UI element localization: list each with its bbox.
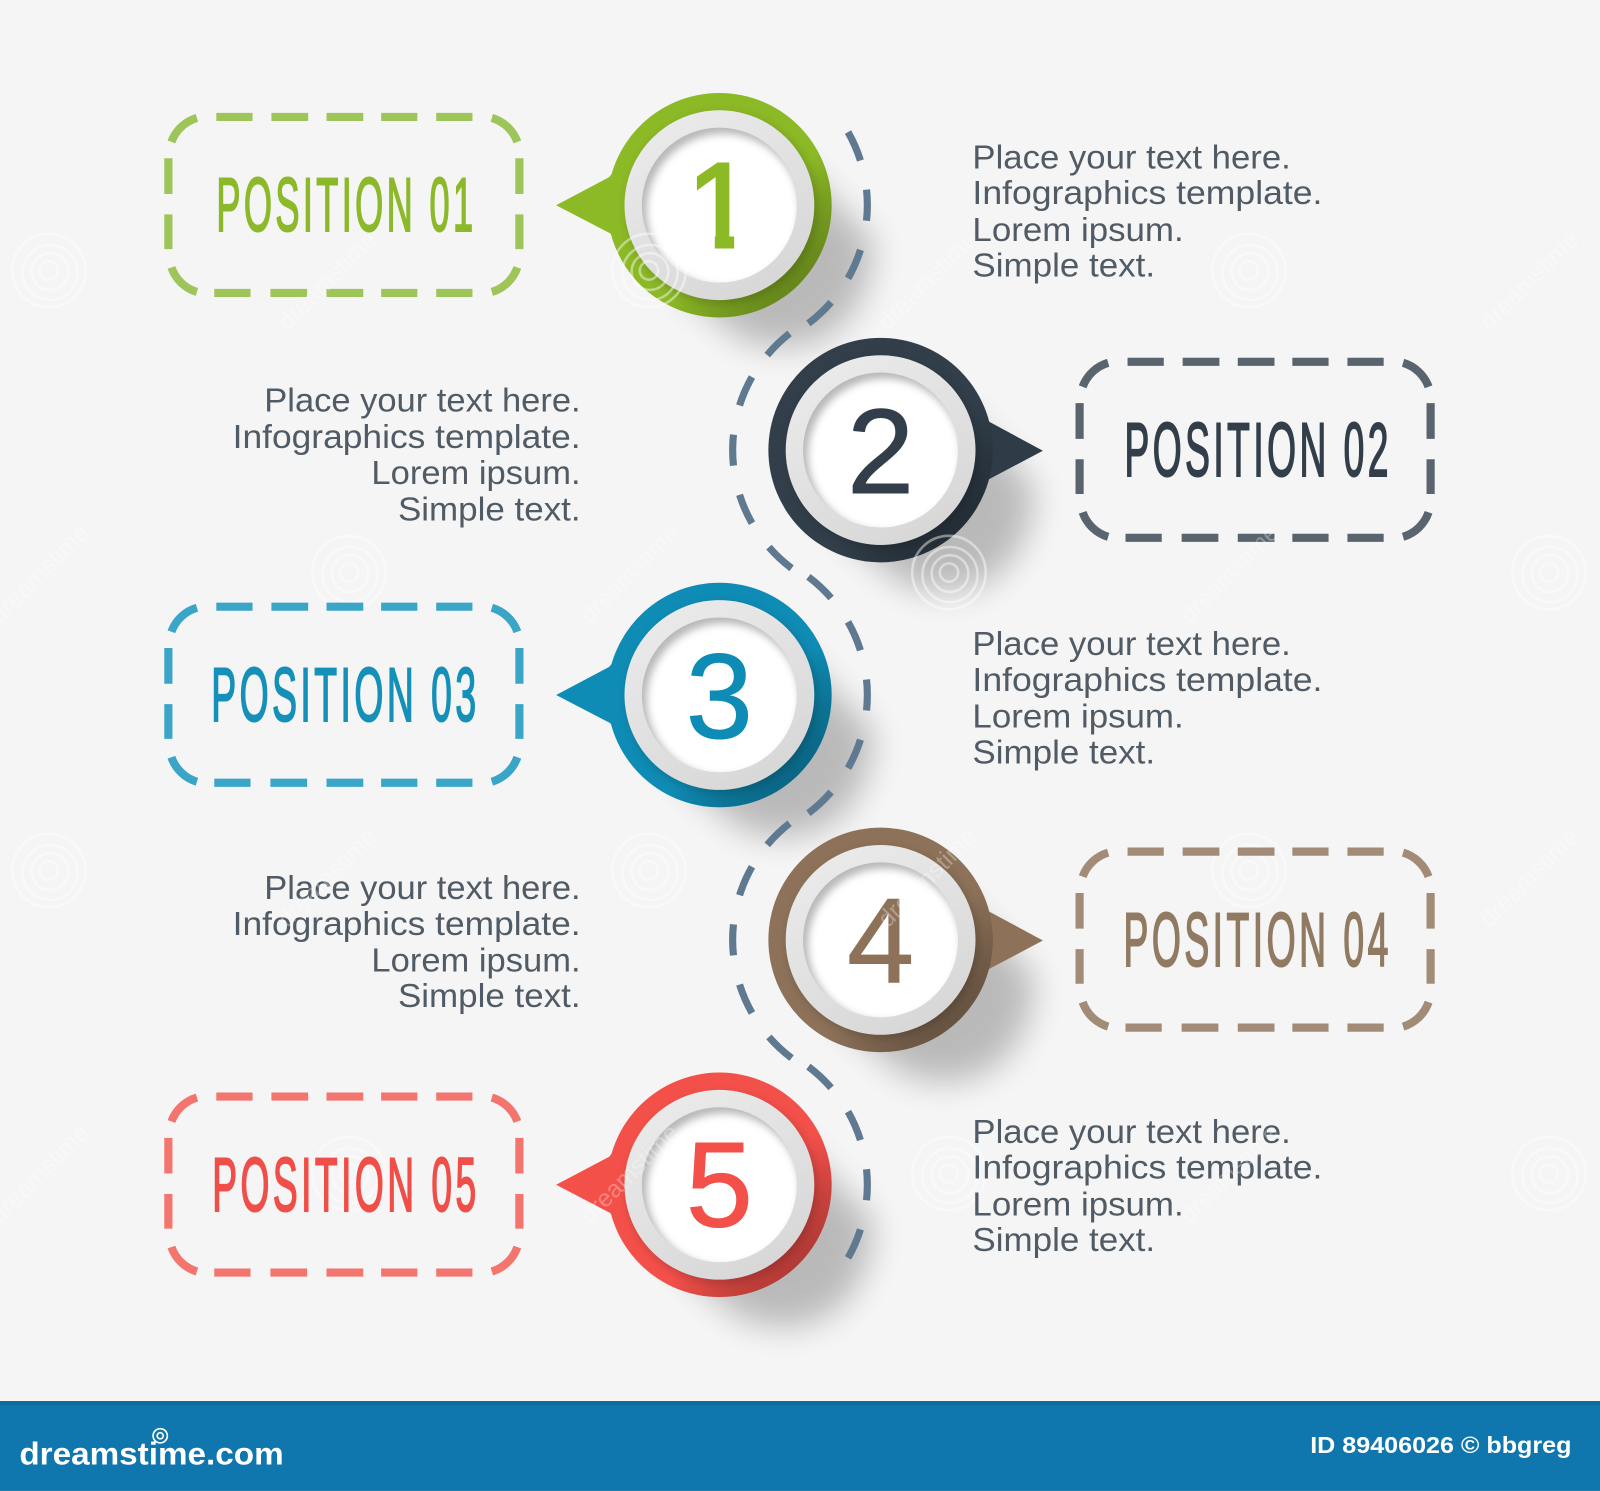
watermark overlay: dreamstime: [273, 823, 382, 933]
dashed connector path: [733, 132, 867, 1258]
text block 3: Place your text here.: [972, 626, 1291, 663]
footer credit: ID 89406026 © bbgreg: [1310, 1432, 1571, 1458]
panel: position 01 box: [168, 117, 519, 293]
number 2: 2: [847, 384, 914, 519]
text block 4: Lorem ipsum.: [371, 943, 581, 980]
text block 5: Place your text here.: [972, 1114, 1291, 1151]
text block 5: Infographics template.: [972, 1150, 1322, 1187]
watermark overlay: dreamstime: [1175, 1119, 1284, 1229]
text block 4: Place your text here.: [264, 870, 581, 907]
text block 4: Infographics template.: [233, 906, 581, 943]
panel: position 03 box: [168, 607, 519, 783]
text block 1: Infographics template.: [972, 175, 1322, 212]
text block 5: Simple text.: [972, 1222, 1155, 1259]
text block 2: Infographics template.: [233, 419, 581, 456]
text block 1: [972, 139, 1322, 285]
watermark overlay: dreamstime: [273, 226, 382, 336]
icon: logo spiral: [153, 1429, 167, 1443]
number 5: 5: [686, 1118, 753, 1253]
number 1 foot mask: [686, 236, 760, 252]
text block 2: Simple text.: [398, 491, 581, 528]
text block 3: [972, 626, 1322, 771]
panel: position 02 box: [1080, 362, 1431, 538]
watermark overlay: dreamstime: [575, 1119, 684, 1229]
number 4: 4: [847, 874, 914, 1009]
badge shadows: [679, 159, 1034, 1327]
text block 2: Lorem ipsum.: [371, 455, 581, 492]
watermark overlay: dreamstime: [1175, 519, 1284, 629]
text block 2: [233, 382, 581, 528]
watermark spirals: [12, 234, 1586, 1210]
badge 3: [556, 583, 832, 807]
panel: position 05 box: [168, 1097, 519, 1273]
panel: position 03 box: POSITION 03: [211, 653, 480, 738]
panel: position 04 box: [1080, 852, 1431, 1028]
badge 5: [556, 1073, 832, 1297]
text block 1: Lorem ipsum.: [972, 212, 1184, 249]
badge 2: [768, 338, 1043, 562]
text block 3: Lorem ipsum.: [972, 699, 1184, 736]
watermark overlay: dreamstime: [1475, 823, 1584, 933]
badge 1: [556, 93, 832, 317]
badge 4: [768, 828, 1043, 1052]
footer band: [0, 1401, 1600, 1491]
text block 4: Simple text.: [398, 978, 581, 1015]
footer logo text: dreamstime.com: [19, 1435, 284, 1471]
text block 1: Place your text here.: [972, 139, 1291, 176]
text block 4: [233, 870, 581, 1015]
watermark overlay: [0, 226, 1584, 1229]
text block 1: Simple text.: [972, 248, 1155, 285]
watermark overlay: dreamstime: [873, 226, 982, 336]
panel: position 05 box: POSITION 05: [212, 1143, 480, 1228]
number 1: 1: [687, 138, 754, 273]
text block 3: Simple text.: [972, 734, 1155, 771]
panel: position 01 box: POSITION 01: [216, 163, 477, 248]
text block 3: Infographics template.: [972, 662, 1322, 699]
text block 2: Place your text here.: [264, 382, 581, 419]
text block 5: [972, 1114, 1322, 1259]
watermark overlay: dreamstime: [1475, 226, 1584, 336]
text block 5: Lorem ipsum.: [972, 1186, 1184, 1223]
watermark overlay: dreamstime: [575, 519, 684, 629]
watermark overlay: dreamstime: [873, 823, 982, 933]
number 3: 3: [686, 629, 753, 764]
